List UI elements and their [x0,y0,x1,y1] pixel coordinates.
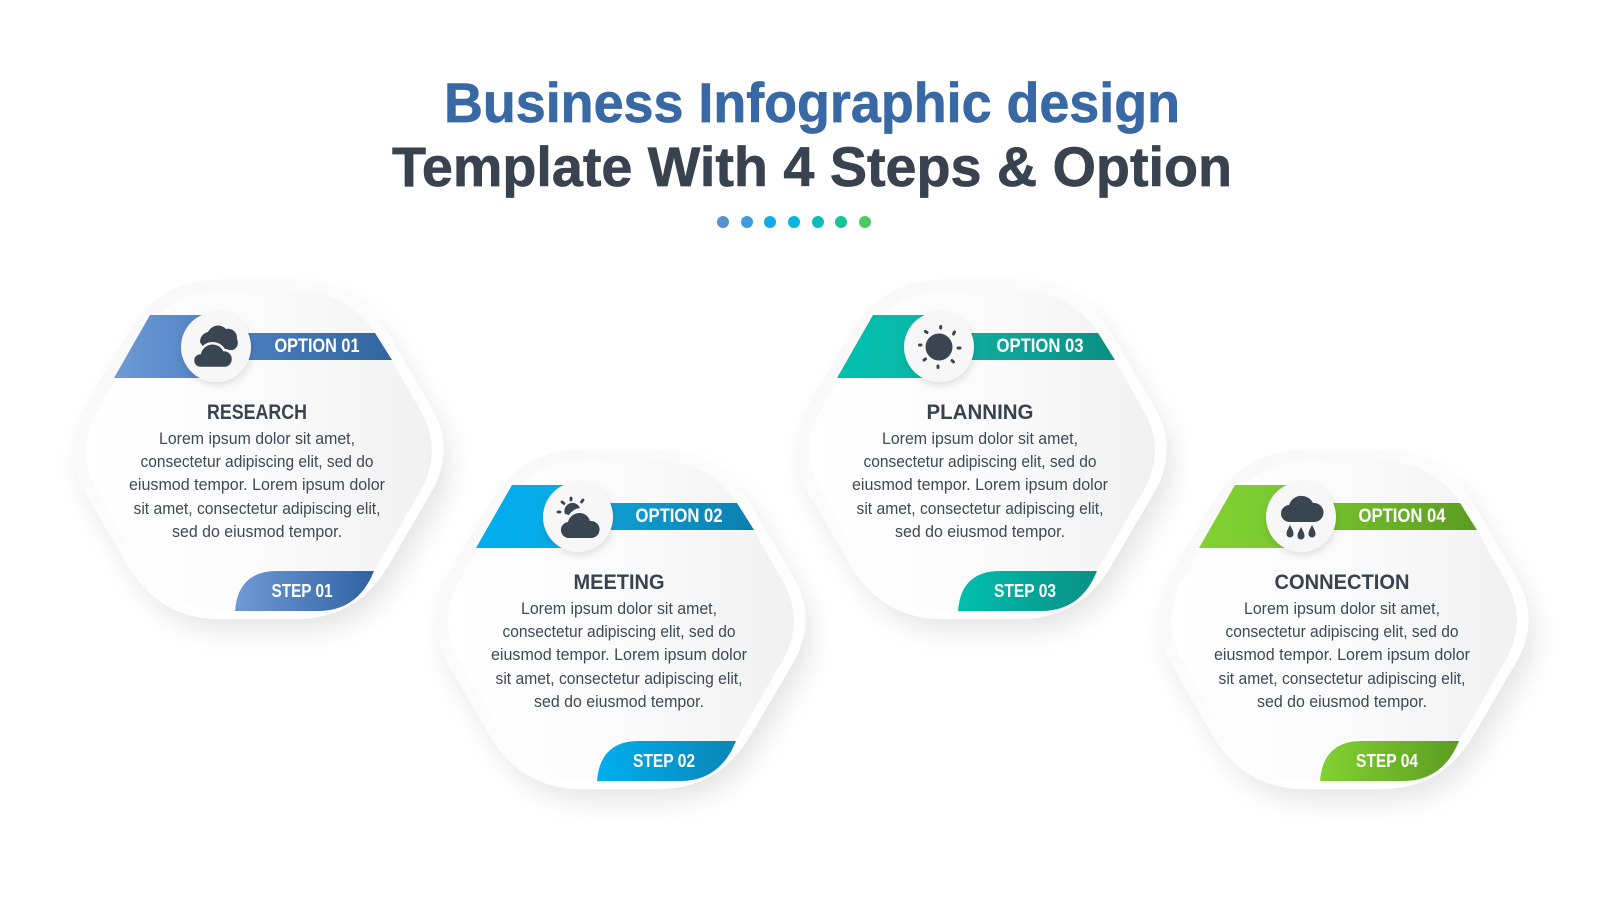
text block: consectetur adipiscing elit, sed do [502,623,736,641]
icon: sun [904,312,974,382]
text block: eiusmod tempor. Lorem ipsum dolor [1214,646,1470,664]
text block: consectetur adipiscing elit, sed do [140,453,374,471]
option banner: OPTION 01 [274,336,360,357]
panel: option 02 meeting [434,450,810,799]
heading: RESEARCH [207,400,307,424]
step tab [597,741,736,781]
option banner [1199,485,1477,548]
icon: rain cloud [1266,482,1336,552]
heading: PLANNING [926,400,1034,424]
step tab [1320,741,1459,781]
text block: sit amet, consectetur adipiscing elit, [1218,670,1466,688]
panel: option 04 connection [1157,450,1533,799]
text block: sit amet, consectetur adipiscing elit, [496,670,742,688]
option banner [837,315,1115,378]
icon: clouds [181,312,251,382]
step tab: STEP 02 [633,750,695,771]
option banner: OPTION 04 [1358,506,1446,527]
text block: Lorem ipsum dolor sit amet, [159,430,355,448]
title: Template With 4 Steps & Option [392,135,1232,198]
step tab [958,571,1097,611]
text block [1214,600,1470,711]
heading: MEETING [574,570,664,594]
text block: sit amet, consectetur adipiscing elit, [856,500,1104,518]
option banner: OPTION 03 [996,336,1084,357]
dotted divider [717,216,871,228]
text block: sed do eiusmod tempor. [534,693,704,711]
text block: sed do eiusmod tempor. [172,523,342,541]
step tab: STEP 03 [994,580,1056,601]
panel: option 01 research [72,280,448,629]
option banner: OPTION 02 [636,506,722,527]
step tab: STEP 04 [1356,750,1419,771]
text block: eiusmod tempor. Lorem ipsum dolor [491,646,747,664]
step tab [235,571,374,611]
text block: consectetur adipiscing elit, sed do [1226,623,1458,641]
text block: Lorem ipsum dolor sit amet, [521,600,717,618]
text block [852,430,1108,541]
icon: sun behind cloud [543,482,613,552]
text block: sit amet, consectetur adipiscing elit, [134,500,380,518]
title: Business Infographic design [444,71,1180,134]
text block: consectetur adipiscing elit, sed do [864,453,1096,471]
text block: eiusmod tempor. Lorem ipsum dolor [852,476,1108,494]
heading: CONNECTION [1274,570,1410,594]
text block: Lorem ipsum dolor sit amet, [1244,600,1440,618]
text block [129,430,385,541]
text block: Lorem ipsum dolor sit amet, [882,430,1078,448]
title [392,71,1232,198]
option banner [114,315,392,378]
text block: eiusmod tempor. Lorem ipsum dolor [129,476,385,494]
text block: sed do eiusmod tempor. [1257,693,1427,711]
text block: sed do eiusmod tempor. [895,523,1065,541]
step tab: STEP 01 [272,580,332,601]
option banner [476,485,754,548]
text block [491,600,747,711]
panel: option 03 planning [795,280,1171,629]
